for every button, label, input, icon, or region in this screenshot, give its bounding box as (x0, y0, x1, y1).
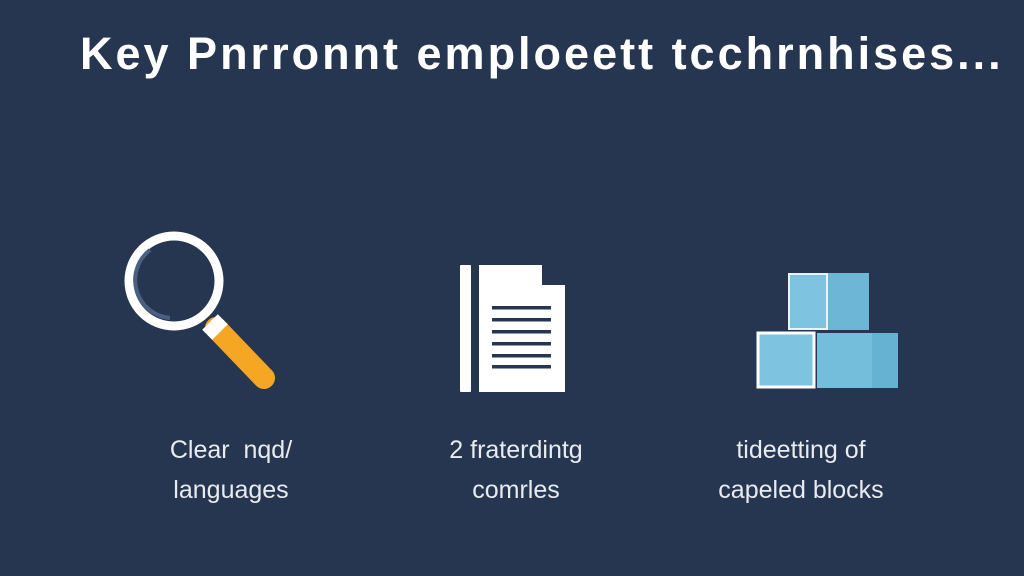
icon: document (460, 265, 565, 392)
caption: blocks: tideetting of (736, 436, 866, 464)
caption: magnifier (170, 436, 292, 504)
caption: blocks: capeled blocks (718, 476, 884, 504)
caption: blocks (718, 436, 884, 504)
caption: document: comrles (472, 476, 560, 504)
icon: blocks (758, 273, 898, 388)
title: Key Pnrronnt emploeett tcchrnhises... (80, 28, 1004, 79)
caption: document: 2 fraterdintg (449, 436, 583, 464)
caption: document (449, 436, 583, 504)
icon: magnifier (129, 236, 264, 378)
caption: magnifier: Clear nqd/ (170, 436, 292, 464)
caption: magnifier: languages (173, 476, 289, 504)
